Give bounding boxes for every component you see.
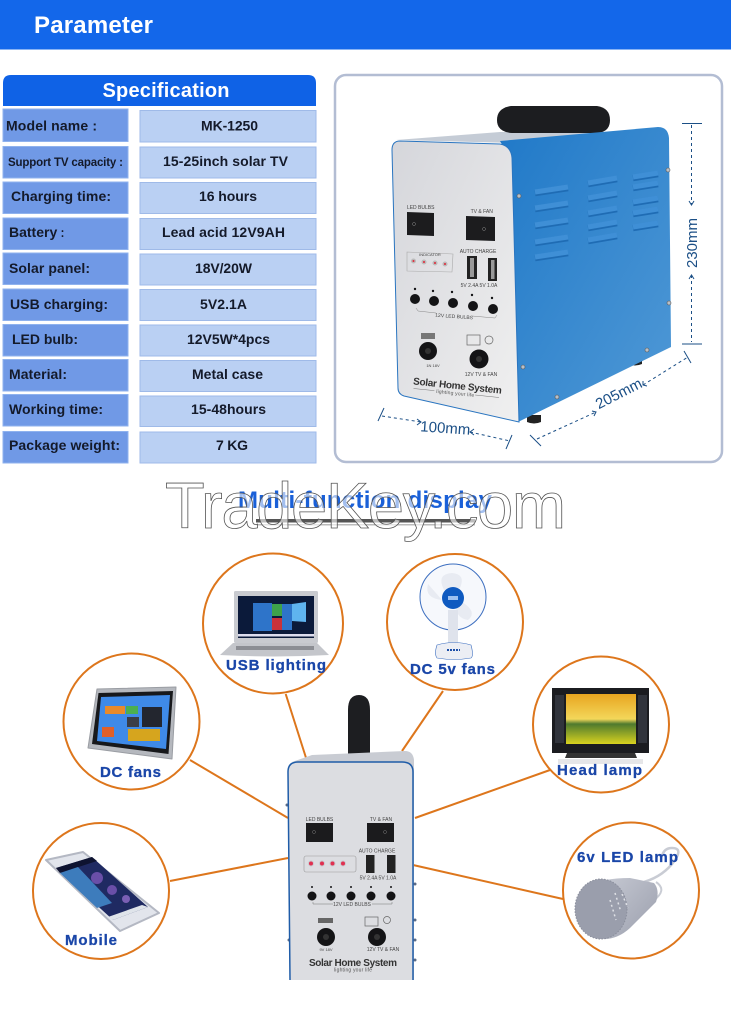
row: LED bulb — [3, 324, 316, 356]
circle: USB lighting — [203, 554, 343, 694]
row: USB charging: 5V2.1A — [200, 296, 247, 312]
dimension: depth 205mm — [530, 351, 691, 446]
label: 6v LED lamp: 6v LED lamp — [577, 849, 678, 866]
watermark: TradeKey.com: TradeKey.com — [165, 469, 566, 542]
device top surface — [396, 130, 600, 143]
front label: lighting your life — [436, 389, 475, 399]
unit power jacks — [317, 916, 400, 953]
row: model name: MK-1250 — [201, 118, 258, 134]
row: charging time — [3, 182, 316, 214]
unit label: lighting your life — [334, 968, 372, 974]
row: charging time: 16 hours — [199, 188, 257, 204]
dimension: height 230mm: 230mm — [684, 218, 701, 268]
switch: LED bulbs: LED BULBS — [407, 205, 435, 211]
dimension: width 100mm — [378, 408, 512, 449]
unit bulb sockets — [308, 886, 396, 908]
unit handle — [348, 695, 370, 757]
unit USB ports: AUTO CHARGE — [359, 848, 396, 854]
switch: TV and fan — [466, 209, 495, 241]
row: working time: Working time: — [9, 401, 103, 417]
row: charging time: Charging time: — [11, 188, 111, 204]
row: battery: Battery — [9, 224, 57, 240]
LED bulb sockets — [410, 288, 498, 321]
row: battery: Lead acid 12V9AH — [162, 224, 285, 240]
USB ports: 5V 2.4A 5V 1.0A — [461, 283, 498, 289]
device: solar home system — [392, 106, 671, 424]
icon: tablet — [88, 687, 176, 759]
dimension: depth 205mm: 205mm — [593, 375, 645, 413]
front label: Solar Home System — [413, 376, 502, 397]
power jacks — [419, 333, 498, 378]
row: model name: Model name : — [6, 118, 97, 134]
connector lines — [170, 691, 563, 899]
panel: product dimensions photo — [335, 75, 722, 462]
device side screws — [517, 168, 671, 399]
icon: television — [552, 688, 649, 764]
unit side studs — [286, 804, 416, 962]
dimension: height 230mm — [682, 124, 702, 344]
device side vents — [535, 173, 658, 258]
power jacks: 1N 18V — [426, 363, 440, 368]
unit switches: LED BULBS — [306, 817, 334, 823]
row: material: Material: — [9, 366, 67, 382]
row: material: Metal case — [192, 366, 263, 382]
LED bulb sockets: 12V LED BULBS — [435, 313, 474, 321]
panel: specification table — [3, 75, 316, 463]
heading: Parameter: Parameter — [34, 12, 153, 39]
USB ports — [460, 249, 498, 289]
row: support TV capacity — [3, 146, 316, 178]
row: package weight: 7 KG — [216, 437, 248, 453]
icon: laptop — [220, 591, 329, 656]
circle: DC 5v fans — [387, 554, 523, 690]
unit top and side — [292, 751, 414, 980]
icon: desk fan — [420, 564, 486, 660]
row: USB charging — [3, 289, 316, 320]
unit switches: TV & FAN — [370, 817, 392, 823]
circle: Mobile — [33, 823, 169, 959]
USB ports: AUTO CHARGE — [460, 249, 497, 255]
unit USB ports — [359, 848, 397, 882]
circle: 6v LED lamp — [563, 822, 699, 958]
row: LED bulb: 12V5W*4pcs — [187, 331, 270, 347]
unit power jacks: 9V 18V — [319, 947, 333, 952]
row: battery: ： — [60, 229, 70, 240]
table heading: Specification — [102, 80, 230, 102]
device handle — [497, 106, 610, 133]
circle: Head lamp — [533, 656, 669, 792]
row: LED bulb: LED bulb: — [12, 331, 78, 347]
battery indicator — [407, 252, 453, 272]
row: solar panel: Solar panel: — [9, 260, 90, 276]
unit bulb sockets: 12V LED BULBS — [333, 902, 372, 908]
switch: TV and fan: TV & FAN — [471, 209, 493, 215]
switch: LED bulbs — [407, 205, 435, 236]
battery indicator: INDICATOR — [419, 252, 441, 257]
row: solar panel: 18V/20W — [195, 260, 253, 276]
label: Head lamp: Head lamp — [557, 762, 642, 779]
label: DC 5v fans: DC 5v fans — [410, 661, 495, 678]
row: material — [3, 360, 316, 392]
row: USB charging: USB charging: — [10, 296, 108, 312]
row: battery — [3, 218, 316, 250]
row: working time — [3, 394, 316, 426]
row: working time: 15-48hours — [191, 401, 266, 417]
unit front face — [288, 762, 413, 980]
row: package weight: Package weight: — [9, 437, 120, 453]
row: model name — [3, 109, 316, 142]
unit USB ports: 5V 2.4A 5V 1.0A — [360, 876, 397, 882]
label: DC fans: DC fans — [100, 764, 161, 781]
unit power jacks: 12V TV & FAN — [367, 947, 400, 953]
icon: smartphone — [46, 852, 159, 931]
header bar — [0, 0, 731, 50]
section heading: Multi-function display: Multi-function display — [238, 487, 493, 514]
device side panel — [500, 127, 671, 422]
row: support TV capacity: Support TV capacity : — [8, 157, 123, 169]
unit indicator — [304, 856, 356, 872]
row: support TV capacity: 15-25inch solar TV — [163, 153, 289, 169]
label: USB lighting: USB lighting — [226, 657, 326, 674]
label: Mobile: Mobile — [65, 932, 117, 949]
device feet — [527, 358, 642, 424]
table heading — [3, 75, 316, 106]
power jacks: 12V TV & FAN — [465, 372, 498, 378]
row: package weight — [3, 432, 316, 463]
icon: LED bulb — [575, 848, 678, 939]
dimension: width 100mm: 100mm — [420, 418, 471, 439]
circle: DC fans — [64, 654, 200, 790]
unit label: Solar Home System — [309, 958, 397, 969]
device front face — [392, 141, 519, 422]
row: solar panel — [3, 253, 316, 285]
unit switches — [306, 817, 394, 842]
device: central solar unit — [286, 695, 416, 980]
section heading: Multi-function display — [238, 487, 493, 526]
